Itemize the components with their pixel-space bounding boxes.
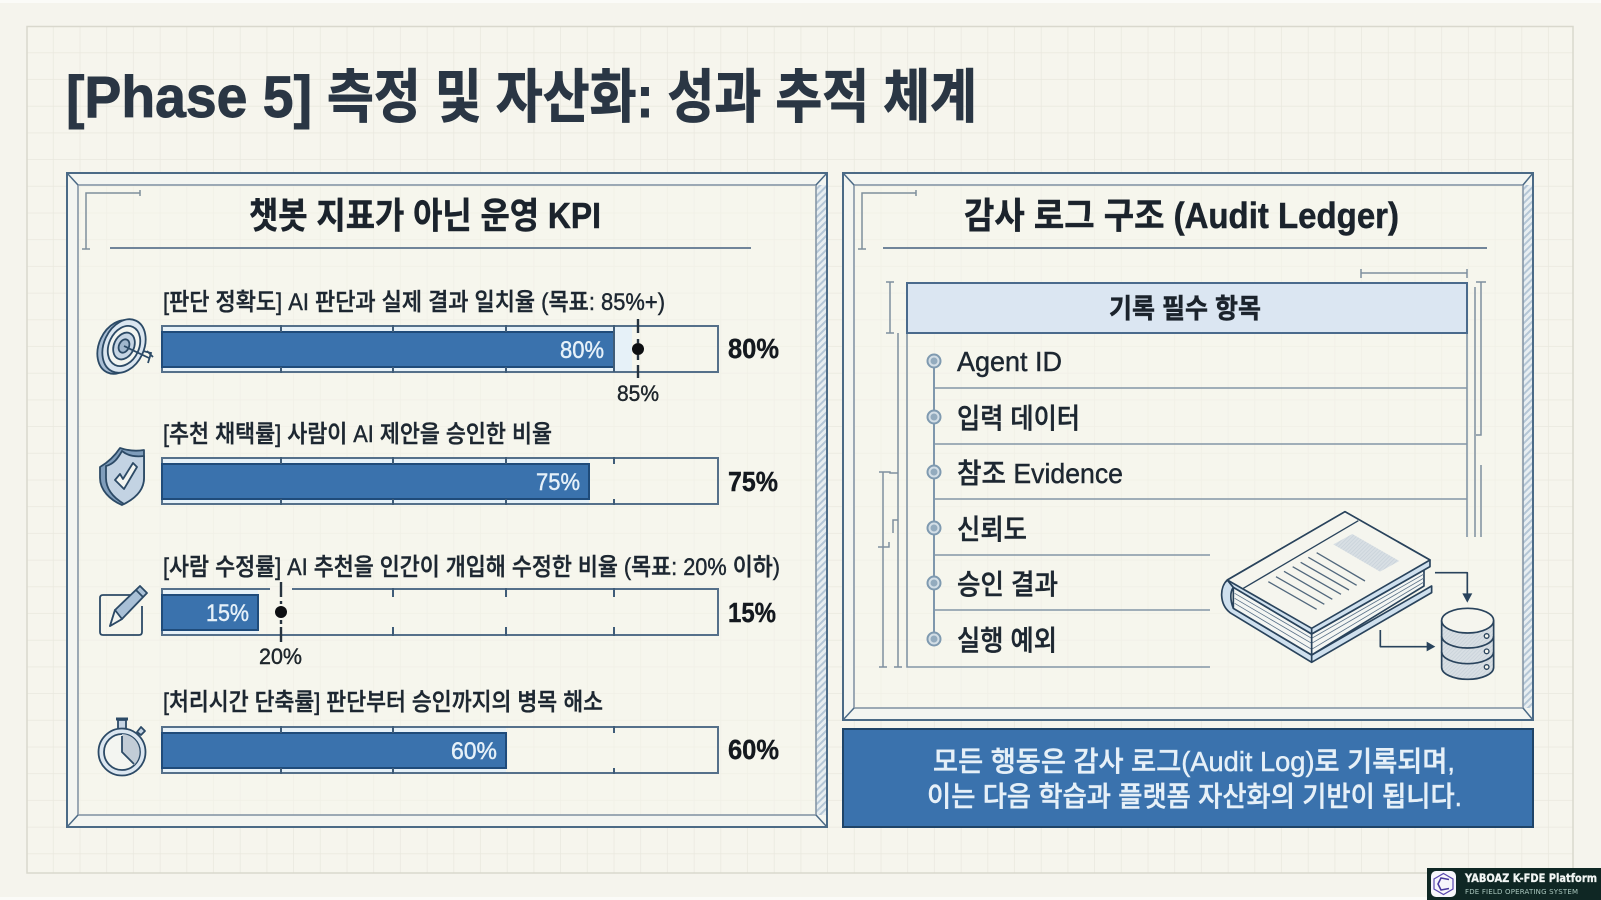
bar: adoption rate 75%: 75% xyxy=(536,469,580,496)
label: human correction rate: [사람 수정률] AI 추천을 인간이 개입해 수정한 비율 (목표: 20% 이하) xyxy=(163,554,780,581)
value: 60%: 60% xyxy=(728,734,779,765)
panel frame: audit ledger xyxy=(843,173,1533,720)
footer badge xyxy=(1427,868,1601,900)
item: confidence xyxy=(928,514,1027,545)
bar: decision accuracy 80% xyxy=(162,325,718,373)
icon: logo xyxy=(1431,871,1456,897)
icon: shield xyxy=(100,448,144,505)
icon: stopwatch xyxy=(98,719,146,776)
record list xyxy=(907,283,1467,667)
item: input data: 입력 데이터 xyxy=(957,403,1080,434)
item: approval result: 승인 결과 xyxy=(957,569,1058,600)
item: execution exception: 실행 예외 xyxy=(957,625,1057,656)
item: Agent ID: Agent ID xyxy=(957,346,1062,377)
bar: processing time reduction 60%: 60% xyxy=(451,738,497,765)
callout: audit log note: 모든 행동은 감사 로그(Audit Log)로 기록되며, xyxy=(933,746,1455,777)
KPI row: adoption rate xyxy=(100,421,778,505)
panel: operational KPI xyxy=(67,173,827,827)
value: 75%: 75% xyxy=(728,466,778,497)
icon: pencil xyxy=(100,586,147,635)
value: 80%: 80% xyxy=(728,333,779,364)
KPI row: processing time reduction xyxy=(98,689,779,776)
title xyxy=(66,65,977,130)
arrow: book to database top xyxy=(1435,573,1472,603)
heading: audit ledger: 감사 로그 구조 (Audit Ledger) xyxy=(964,195,1399,236)
list header xyxy=(907,283,1467,333)
target marker: 85% xyxy=(617,319,659,406)
callout: audit log note: 이는 다음 학습과 플랫폼 자산화의 기반이 됩니다. xyxy=(927,781,1462,812)
arrow: book to database side xyxy=(1380,630,1435,651)
bar: human correction rate 15% xyxy=(162,587,718,636)
label: decision accuracy: [판단 정확도] AI 판단과 실제 결과 일치율 (목표: 85%+) xyxy=(163,289,665,316)
heading: KPI: 챗봇 지표가 아닌 운영 KPI xyxy=(249,195,601,236)
panel: audit ledger xyxy=(843,173,1533,720)
label: processing time reduction: [처리시간 단축률] 판단부터 승인까지의 병목 해소 xyxy=(163,689,603,716)
label: adoption rate: [추천 채택률] 사람이 AI 제안을 승인한 비율 xyxy=(163,421,552,448)
title: 측정 및 자산화: 성과 추적 체계 xyxy=(327,65,977,130)
footer badge: FDE FIELD OPERATING SYSTEM xyxy=(1465,888,1578,896)
item: reference evidence: 참조 Evidence xyxy=(957,458,1123,489)
value: 15%: 15% xyxy=(728,597,776,628)
icon: ledger book and database xyxy=(1222,512,1494,679)
icon: target xyxy=(89,312,154,381)
item: confidence: 신뢰도 xyxy=(957,514,1027,545)
list header: 기록 필수 항목 xyxy=(1109,294,1261,324)
target marker: 20% xyxy=(259,582,302,669)
bar: decision accuracy 80%: 80% xyxy=(560,337,604,364)
KPI row: decision accuracy xyxy=(89,289,779,406)
bar: adoption rate 75% xyxy=(162,457,718,505)
panel frame: KPI xyxy=(67,173,827,827)
target marker: 85%: 85% xyxy=(617,381,659,406)
database xyxy=(1442,608,1494,679)
KPI row: human correction rate xyxy=(100,554,780,669)
bar: human correction rate 15%: 15% xyxy=(206,600,249,627)
bar: processing time reduction 60% xyxy=(162,726,718,774)
target marker: 20%: 20% xyxy=(259,644,302,669)
title: [Phase 5] xyxy=(66,65,312,130)
book xyxy=(1222,512,1432,662)
callout: audit log note xyxy=(843,729,1533,827)
